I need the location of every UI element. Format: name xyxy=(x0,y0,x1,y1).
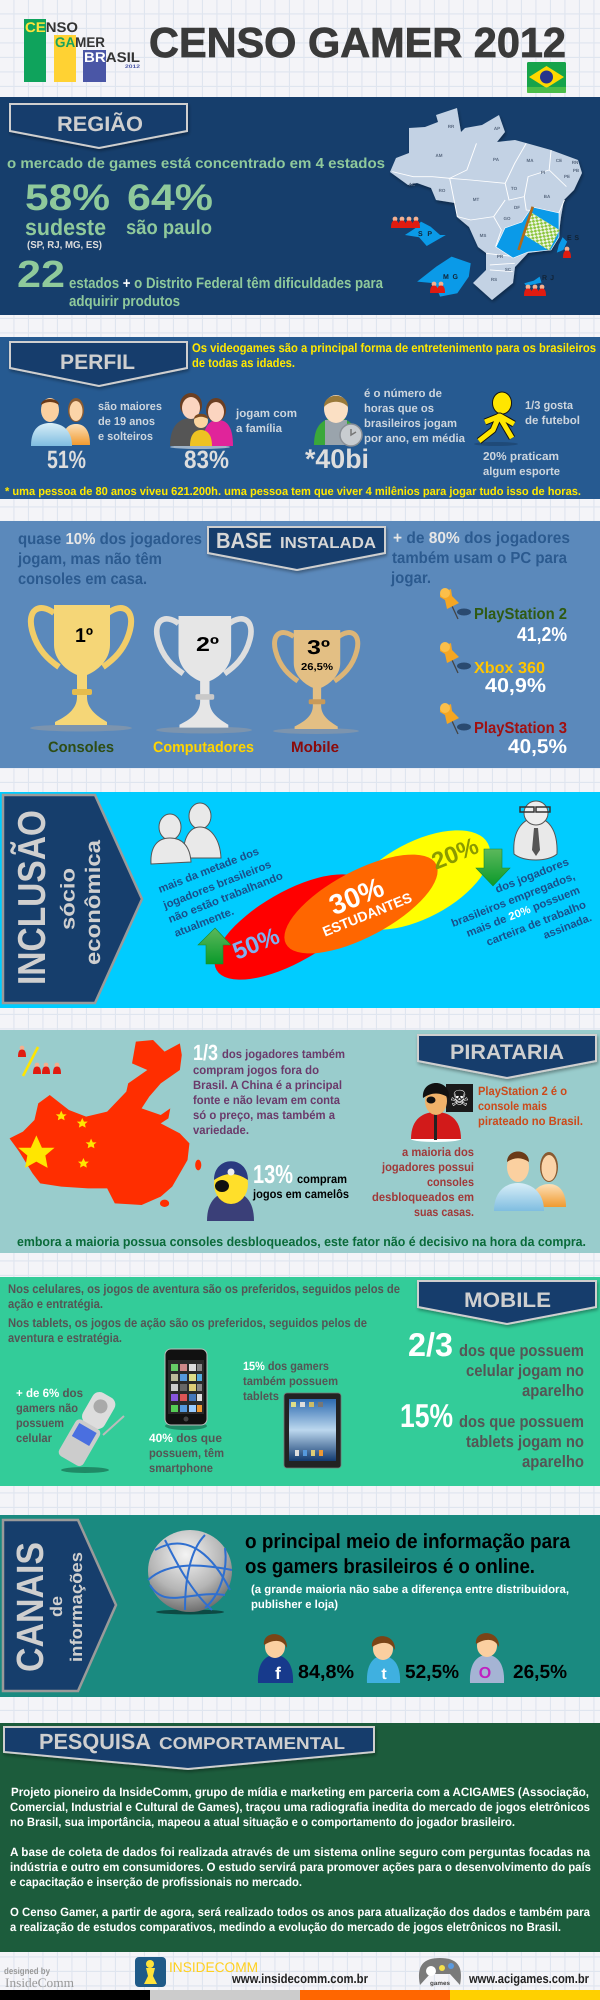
text: conclusão pirataria: embora a maioria possua consoles desbloqueados, este fator não é decisivo na hora da compra. xyxy=(17,1234,586,1249)
logo: acigames: games xyxy=(430,1981,451,1987)
stat: 51%: 51% xyxy=(47,446,86,474)
map: brazil: AP xyxy=(494,126,500,131)
ribbon heading: região xyxy=(10,104,187,148)
text: sem celular xyxy=(16,1386,83,1445)
panel: região xyxy=(0,97,600,315)
credit: designed by: designed by xyxy=(4,1966,50,1976)
stat: 15% tablets xyxy=(400,1397,584,1471)
ribbon heading: mobile: MOBILE xyxy=(464,1289,551,1312)
logo: insidecomm xyxy=(135,1957,258,1987)
stat: 2/3 celular: aparelho xyxy=(522,1382,584,1400)
text: 19 anos xyxy=(98,401,162,443)
text: camelôs: 13% xyxy=(253,1159,293,1189)
panel: canais xyxy=(0,1515,600,1697)
ribbon heading: perfil xyxy=(10,342,187,386)
text: futebol: de futebol xyxy=(525,415,580,427)
text: parágrafo 2 xyxy=(10,1845,591,1889)
text: tablets: 15% dos gamers xyxy=(243,1359,329,1373)
text: mercado concentrado: o mercado de games está concentrado em 4 estados xyxy=(7,156,385,172)
ribbon heading: canais de informações: informações xyxy=(67,1552,86,1662)
panel: base instalada xyxy=(0,521,600,768)
stat: 58% sudeste xyxy=(25,177,110,251)
map: brazil: DF xyxy=(514,205,520,210)
map: brazil: AC xyxy=(409,182,416,187)
icon: pirate person with flag: ☠ xyxy=(450,1087,469,1112)
ribbon heading: perfil: PERFIL xyxy=(60,351,135,374)
icon: family xyxy=(170,393,233,449)
map: brazil: TO xyxy=(511,186,518,191)
ranking: playstation 3 xyxy=(474,720,567,758)
chart: overlapping ellipses: 20% xyxy=(428,833,483,876)
text: jogam com a família: a família xyxy=(236,423,283,435)
map: brazil: SC xyxy=(505,267,512,272)
text: meio de informação online xyxy=(245,1530,571,1578)
text: futebol xyxy=(525,400,580,427)
text: consoles desbloqueados xyxy=(372,1145,474,1219)
ranking: playstation 3: 40,5% xyxy=(508,736,567,758)
map: brazil: MA xyxy=(526,158,534,163)
text: sem celular: gamers não xyxy=(16,1401,78,1415)
icon: smartphone xyxy=(165,1349,207,1430)
icon: brazil flag xyxy=(527,62,566,93)
text: compram fora do brasil: 1/3 xyxy=(193,1040,218,1065)
map: brazil: GO xyxy=(503,216,511,221)
text: nota distribuidora xyxy=(251,1584,569,1611)
logo: censo gamer brasil: BRASIL xyxy=(84,49,140,65)
text: não trabalhando: não estão trabalhando xyxy=(167,870,285,926)
icon: sketch man with glasses xyxy=(514,801,557,860)
text: 19 anos: são maiores xyxy=(98,401,162,413)
trophy: computadores silver xyxy=(156,616,252,734)
text: meio de informação online: o principal meio de informação para xyxy=(245,1530,571,1553)
icon: down arrow xyxy=(476,849,510,886)
ranking: playstation 2 xyxy=(474,606,567,646)
icon: up arrow xyxy=(198,928,231,964)
map: brazil xyxy=(390,108,582,300)
stat: 2/3 celular: dos que possuem xyxy=(459,1342,584,1360)
text: camelôs xyxy=(252,1159,349,1201)
icon: checkered flag xyxy=(519,207,560,251)
text: horas por ano xyxy=(364,388,466,445)
text: nota distribuidora: publisher e loja) xyxy=(251,1599,338,1611)
stat: 2/3 celular: 2/3 xyxy=(408,1326,453,1363)
credit: designed by xyxy=(4,1966,74,1990)
trophy: consoles gold xyxy=(30,605,132,732)
text: parágrafo 1: no Brasil, sua importância, mapeou a atual situação e o comportamento do jogador brasileiro. xyxy=(10,1815,515,1829)
stat: 22 estados: adquirir produtos xyxy=(69,293,180,310)
label: consoles: Consoles xyxy=(48,739,114,756)
text: futebol: 1/3 gosta xyxy=(525,400,574,412)
url: insidecomm: www.insidecomm.com.br xyxy=(231,1971,368,1986)
map label: mg: MG xyxy=(443,274,459,281)
icon: pin 3 xyxy=(440,703,471,734)
text: compram fora do brasil: Brasil. A China é a principal xyxy=(193,1078,342,1092)
trophy: computadores silver: 2º xyxy=(196,634,219,656)
text: camelôs: compram xyxy=(297,1172,347,1186)
trophy: mobile bronze: 3º xyxy=(307,637,330,659)
ribbon heading: inclusão socioeconômica: INCLUSÃO xyxy=(10,810,54,985)
ribbon heading: inclusão socioeconômica: econômica xyxy=(82,840,105,965)
ribbon heading: pirataria: PIRATARIA xyxy=(450,1041,564,1064)
icon: twitter user: t xyxy=(381,1666,387,1683)
icon: network globe xyxy=(148,1530,232,1614)
ribbon heading: canais de informações xyxy=(3,1520,116,1691)
text: carteira assinada: dos jogadores xyxy=(494,856,571,896)
text: nota distribuidora: (a grande maioria não sabe a diferença entre distribuidora, xyxy=(251,1584,569,1596)
text: não trabalhando: jogadores brasileiros xyxy=(161,859,273,912)
map label: rj: RJ xyxy=(542,275,554,282)
map: brazil: RO xyxy=(439,188,446,193)
map detail: mg state xyxy=(417,257,471,297)
text: sem consoles: quase 10% dos jogadores xyxy=(18,531,202,548)
ribbon heading: base instalada: INSTALADA xyxy=(280,535,376,552)
ribbon heading: base instalada: BASE xyxy=(216,528,272,553)
logo: censo gamer brasil: GAMER xyxy=(55,34,105,50)
icon: user with clock xyxy=(314,395,362,446)
map: brazil: PR xyxy=(497,254,504,259)
text: intro xyxy=(192,341,596,370)
map: brazil: MS xyxy=(480,233,486,238)
text: usam pc: + de 80% dos jogadores xyxy=(393,530,570,547)
map: brazil: PB xyxy=(573,168,580,173)
ribbon heading: mobile xyxy=(418,1281,596,1324)
ranking: playstation 3: PlayStation 3 xyxy=(474,720,567,737)
footnote: * uma pessoa de 80 anos viveu 621.200h. uma pessoa tem que viver 4 milênios para jogar tudo isso de horas. xyxy=(5,486,581,498)
text: 19 anos: de 19 anos xyxy=(98,416,155,428)
text: sem consoles xyxy=(17,531,202,588)
text: consoles desbloqueados: desbloqueados em xyxy=(372,1190,474,1204)
panel: perfil xyxy=(0,337,600,499)
text: horas por ano: horas que os xyxy=(364,403,434,415)
ribbon heading: pesquisa comportamental: PESQUISA xyxy=(39,1729,151,1754)
text: sem celular: + de 6% dos xyxy=(16,1386,83,1400)
text: parágrafo 1 xyxy=(10,1785,590,1829)
stat: 84,8%: 84,8% xyxy=(298,1662,354,1683)
text: smartphone: 40% dos que xyxy=(149,1431,222,1445)
text: tablets xyxy=(243,1359,338,1403)
text: compram fora do brasil: variedade. xyxy=(193,1123,249,1137)
trophy: mobile bronze xyxy=(273,630,359,734)
panel: mobile xyxy=(0,1277,600,1486)
icon: tablet xyxy=(284,1393,341,1468)
text: ps2 mais pirateado xyxy=(478,1084,583,1128)
label: mobile: Mobile xyxy=(291,739,339,756)
text: intro: de todas as idades. xyxy=(192,356,295,370)
map: brazil: CE xyxy=(556,158,562,163)
map label: es: ES xyxy=(567,235,579,242)
colour strip xyxy=(0,1990,600,2000)
logo: censo gamer brasil: CENSO xyxy=(25,19,78,35)
text: camelôs: jogos em camelôs xyxy=(252,1187,349,1201)
map: brazil: RR xyxy=(448,124,455,129)
text: parágrafo 3: a realização de estudos comparativos, medindo a evolução do mercado de jogos eletrônicos no Brasil. xyxy=(10,1920,561,1934)
text: esporte xyxy=(483,451,560,478)
text: jogam com a família xyxy=(235,408,297,435)
stat: 64% são paulo xyxy=(126,177,213,239)
stat: 22 estados: estados + o Distrito Federal têm dificuldades para xyxy=(69,275,384,292)
map: brazil: PA xyxy=(493,157,500,162)
text: compram fora do brasil: só o preço, mas também a xyxy=(193,1108,335,1122)
text: tablets: também possuem xyxy=(243,1374,338,1388)
text: smartphone: smartphone xyxy=(149,1461,213,1475)
text: consoles desbloqueados: jogadores possui xyxy=(381,1160,474,1174)
chart: overlapping ellipses xyxy=(199,810,506,1000)
panel: pirataria xyxy=(0,1030,600,1253)
stat: 2/3 celular: celular jogam no xyxy=(466,1362,584,1380)
text: parágrafo 1: Projeto pioneiro da InsideComm, grupo de mídia e marketing em parceria com a ACIGAMES (Associação, xyxy=(11,1785,589,1799)
icon: running yellow figure xyxy=(474,392,518,446)
map: brazil: MT xyxy=(473,197,479,202)
text: ps2 mais pirateado: console mais xyxy=(478,1099,547,1113)
stat: 58% sudeste: (SP, RJ, MG, ES) xyxy=(27,240,102,251)
ribbon heading: pesquisa comportamental xyxy=(4,1727,374,1769)
text: carteira assinada xyxy=(450,856,594,949)
icon: orkut user: O xyxy=(479,1665,491,1682)
text: horas por ano: por ano, em média xyxy=(364,433,466,445)
stat: 15% tablets: tablets jogam no xyxy=(466,1433,584,1451)
text: preferências de jogos: aventura e estratégia. xyxy=(8,1331,122,1345)
text: esporte: 20% praticam xyxy=(483,451,559,463)
stat: 58% sudeste: 58% xyxy=(25,177,110,218)
text: compram fora do brasil xyxy=(193,1040,345,1137)
ranking: playstation 2: PlayStation 2 xyxy=(474,606,567,623)
map: china xyxy=(10,1040,201,1207)
map detail: rj state xyxy=(524,277,542,286)
icon: people counters xyxy=(391,217,571,296)
stat: 40bi: *40bi xyxy=(305,444,369,474)
text: compram fora do brasil: fonte e não levam em conta xyxy=(193,1093,340,1107)
icon: pirate person with flag xyxy=(411,1083,473,1142)
text: usam pc: jogar. xyxy=(390,570,431,587)
stat: 15% tablets: aparelho xyxy=(522,1453,584,1471)
map: brazil: PI xyxy=(541,170,545,175)
text: não trabalhando: atualmente. xyxy=(173,906,236,940)
trophy: consoles gold: 1º xyxy=(75,625,93,647)
ribbon heading: região: REGIÃO xyxy=(57,112,143,136)
text: parágrafo 2: e capacitação e inserção de profissionais no mercado. xyxy=(10,1875,302,1889)
text: parágrafo 3 xyxy=(10,1905,590,1934)
trophy: mobile bronze: 26,5% xyxy=(301,662,333,673)
text: compram fora do brasil: dos jogadores também xyxy=(222,1047,345,1061)
ranking: xbox 360 xyxy=(474,660,546,697)
text: carteira assinada: brasileiros empregados, xyxy=(450,870,577,930)
text: horas por ano: é o número de xyxy=(364,388,442,400)
text: carteira assinada: assinada. xyxy=(542,912,594,942)
text: ps2 mais pirateado: pirateado no Brasil. xyxy=(478,1114,583,1128)
icon: couple xyxy=(31,398,90,446)
ranking: playstation 2: 41,2% xyxy=(517,624,567,646)
ribbon heading: base instalada xyxy=(208,527,385,570)
text: sem celular: possuem xyxy=(16,1416,64,1430)
map: brazil: AM xyxy=(436,153,443,158)
stat: 58% sudeste: sudeste xyxy=(25,214,106,240)
text: tablets: tablets xyxy=(243,1389,279,1403)
stat: 15% tablets: 15% xyxy=(400,1397,453,1434)
icon: flip phone xyxy=(57,1388,124,1473)
text: preferências de jogos: Nos celulares, os jogos de aventura são os preferidos, seguidos pelos de xyxy=(8,1282,400,1296)
chart: overlapping ellipses: 30% xyxy=(325,871,388,921)
text: parágrafo 2: A base de coleta de dados foi realizada através de um sistema online seguro com perguntas focadas na xyxy=(10,1845,590,1859)
stat: 64% são paulo: são paulo xyxy=(126,217,212,239)
ranking: xbox 360: Xbox 360 xyxy=(474,660,545,677)
stat: 22 estados xyxy=(17,254,384,310)
text: meio de informação online: os gamers brasileiros é o online. xyxy=(245,1555,535,1578)
text: usam pc: também usam o PC para xyxy=(392,550,567,567)
text: usam pc xyxy=(390,530,570,587)
stat: 15% tablets: dos que possuem xyxy=(459,1413,584,1431)
text: sem consoles: jogam, mas não têm xyxy=(17,551,162,568)
ribbon heading: inclusão socioeconômica: sócio xyxy=(58,868,80,930)
stat: 2/3 celular xyxy=(408,1326,584,1400)
ribbon heading: pirataria xyxy=(418,1035,596,1078)
header xyxy=(24,19,566,93)
text: não trabalhando: mais da metade dos xyxy=(157,846,261,896)
stat: 64% são paulo: 64% xyxy=(127,177,213,218)
credit: designed by: InsideComm xyxy=(5,1975,74,1990)
ribbon heading: inclusão socioeconômica xyxy=(3,795,142,1003)
icon: orkut user xyxy=(470,1633,504,1683)
map label: sp: SP xyxy=(418,231,432,238)
stat: 26,5%: 26,5% xyxy=(513,1662,567,1683)
text: compram fora do brasil: compram jogos fora do xyxy=(193,1063,319,1077)
stat: 83%: 83% xyxy=(184,446,229,474)
map: brazil: BA xyxy=(544,194,551,199)
text: sem consoles: consoles em casa. xyxy=(18,571,147,588)
panel: inclusão xyxy=(0,792,600,1008)
text: preferências de jogos: ação e entratégia. xyxy=(8,1297,103,1311)
stat: 52,5%: 52,5% xyxy=(405,1662,459,1683)
chart: overlapping ellipses: 50% xyxy=(229,923,284,966)
icon: twitter user xyxy=(367,1636,400,1683)
ribbon heading: canais de informações: de xyxy=(47,1596,66,1617)
map detail: sp state xyxy=(405,222,446,246)
logo: acigames xyxy=(419,1958,461,1987)
text: jogam com a família: jogam com xyxy=(235,408,297,420)
panel: pesquisa comportamental xyxy=(0,1723,600,1952)
icon: pin 2 xyxy=(440,642,471,673)
chart: overlapping ellipses: ESTUDANTES xyxy=(320,889,414,940)
map: brazil: RN xyxy=(572,160,578,165)
icon: facebook user xyxy=(258,1634,293,1683)
icon: facebook user: f xyxy=(275,1664,281,1683)
icon: sketch people xyxy=(151,803,221,864)
footer xyxy=(0,1957,600,2000)
text: smartphone xyxy=(149,1431,224,1475)
ribbon heading: canais de informações: CANAIS xyxy=(10,1542,52,1672)
stat: 22 estados: 22 xyxy=(17,254,65,296)
logo: censo gamer brasil: 2012 xyxy=(125,64,140,70)
icon: couple xyxy=(494,1152,566,1211)
text: não trabalhando xyxy=(157,846,285,940)
ranking: xbox 360: 40,9% xyxy=(485,675,546,697)
text: carteira assinada: mais de 20% possuem xyxy=(465,884,582,940)
icon: pin 1 xyxy=(440,588,471,619)
text: esporte: algum esporte xyxy=(483,466,560,478)
text: consoles desbloqueados: a maioria dos xyxy=(402,1145,474,1159)
text: consoles desbloqueados: suas casas. xyxy=(414,1205,474,1219)
ribbon heading: pesquisa comportamental: COMPORTAMENTAL xyxy=(159,1734,345,1753)
text: sem celular: celular xyxy=(16,1431,52,1445)
text: ps2 mais pirateado: PlayStation 2 é o xyxy=(478,1084,567,1098)
text: horas por ano: brasileiros jogam xyxy=(364,418,457,430)
text: carteira assinada: carteira de trabalho xyxy=(485,899,588,949)
text: preferências de jogos xyxy=(8,1282,400,1345)
text: 19 anos: e solteiros xyxy=(98,431,153,443)
map detail: es state xyxy=(557,237,567,253)
logo: censo gamer brasil xyxy=(24,19,140,82)
label: computadores: Computadores xyxy=(153,739,254,756)
text: smartphone: possuem, têm xyxy=(149,1446,224,1460)
logo: insidecomm: INSIDECOMM xyxy=(169,1959,258,1975)
text: preferências de jogos: Nos tablets, os jogos de ação são os preferidos, seguidos pelos de xyxy=(8,1316,367,1330)
icon: one in three people xyxy=(18,1046,61,1076)
map: brazil: PE xyxy=(564,174,570,179)
title: CENSO GAMER 2012 xyxy=(149,19,566,66)
text: consoles desbloqueados: consoles xyxy=(427,1175,474,1189)
map: brazil: RS xyxy=(491,277,497,282)
icon: pirate emoticon xyxy=(207,1161,254,1221)
